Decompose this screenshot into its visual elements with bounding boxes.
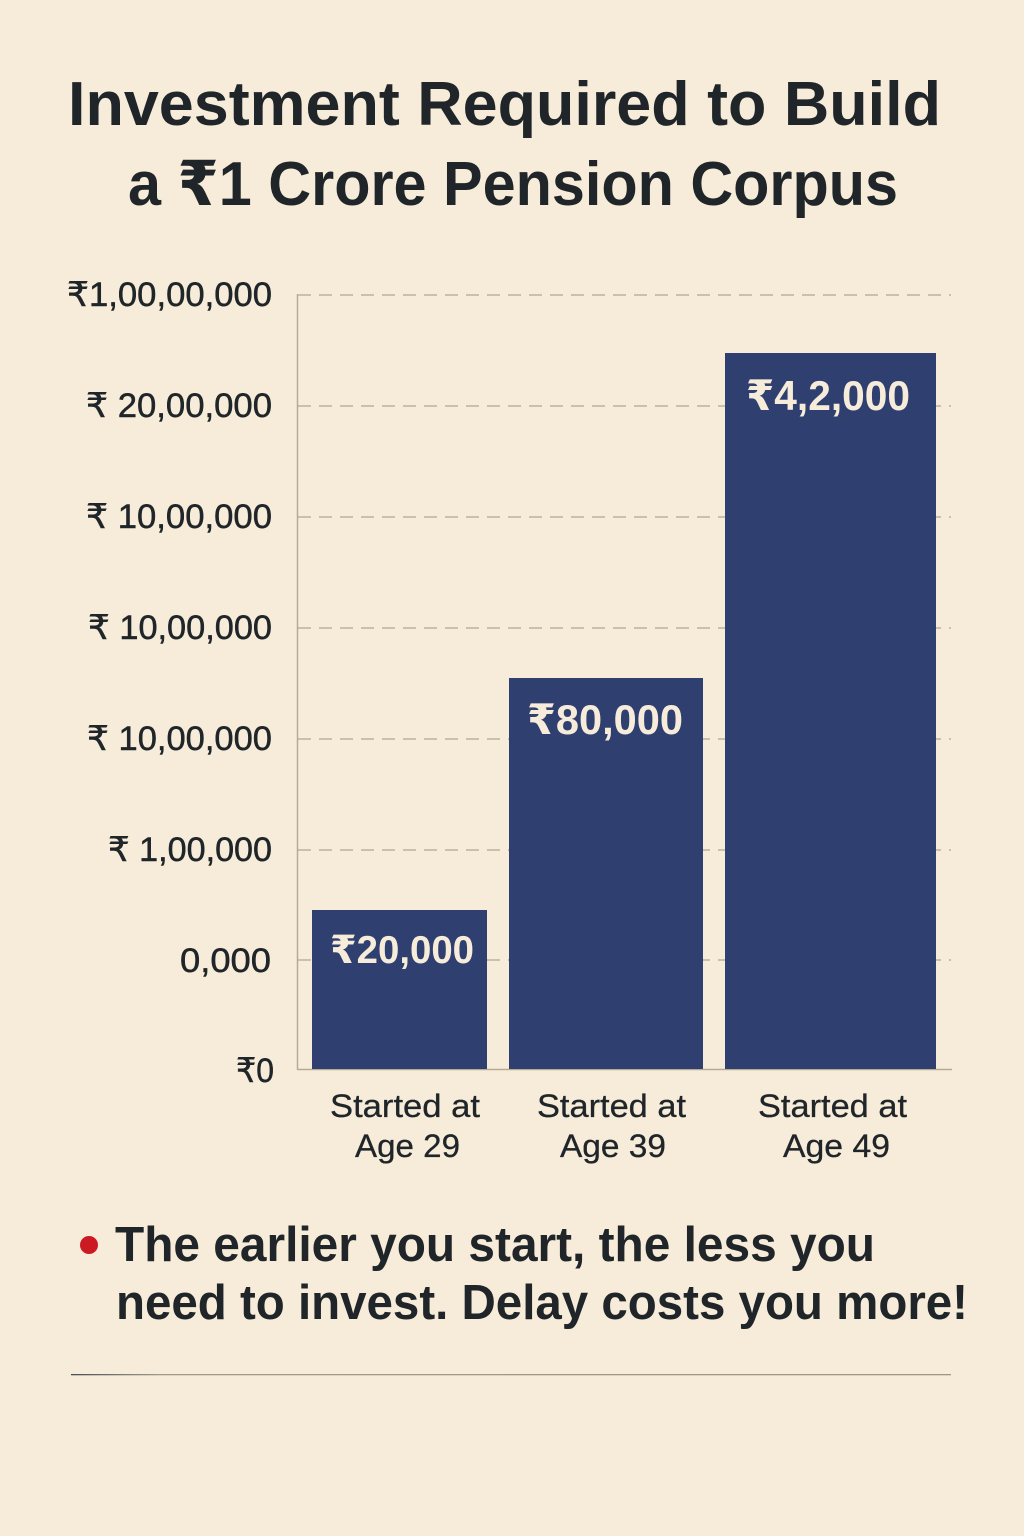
y-axis labels: ₹ 10,00,000 xyxy=(88,609,272,647)
bar: started at age 49 xyxy=(725,353,936,1069)
x-axis labels: Started at xyxy=(537,1088,686,1124)
y-axis labels: 0,000 xyxy=(180,942,271,980)
title xyxy=(68,70,941,219)
takeaway callout xyxy=(80,1218,968,1330)
x-axis labels: Age 39 xyxy=(560,1128,666,1164)
takeaway text: The earlier you start, the less you xyxy=(115,1218,875,1272)
bar: started at age 39 xyxy=(509,678,703,1069)
title: Investment Required to Build xyxy=(68,70,941,139)
bar: started at age 29 xyxy=(312,910,487,1069)
takeaway text xyxy=(115,1218,968,1330)
bar: started at age 29: ₹20,000 xyxy=(330,929,474,972)
x-axis labels xyxy=(330,1088,907,1164)
bar chart xyxy=(67,276,952,1164)
y-axis labels: ₹ 10,00,000 xyxy=(87,720,272,758)
y-axis labels: ₹0 xyxy=(236,1052,274,1090)
y-axis labels: ₹ 20,00,000 xyxy=(86,387,272,425)
x-axis labels: Age 49 xyxy=(783,1128,890,1164)
takeaway text: need to invest. Delay costs you more! xyxy=(116,1276,968,1330)
y-axis labels: ₹ 10,00,000 xyxy=(86,498,272,536)
x-axis labels: Started at xyxy=(758,1088,907,1124)
y-axis labels: ₹1,00,00,000 xyxy=(67,276,272,314)
y-axis labels xyxy=(67,276,274,1090)
title: a ₹1 Crore Pension Corpus xyxy=(128,150,898,219)
y-axis labels: ₹ 1,00,000 xyxy=(108,831,272,869)
bar: started at age 49: ₹4,2,000 xyxy=(746,372,910,419)
bar: started at age 39: ₹80,000 xyxy=(527,696,683,743)
icon: red bullet xyxy=(80,1236,98,1254)
x-axis labels: Age 29 xyxy=(355,1128,460,1164)
x-axis labels: Started at xyxy=(330,1088,480,1124)
